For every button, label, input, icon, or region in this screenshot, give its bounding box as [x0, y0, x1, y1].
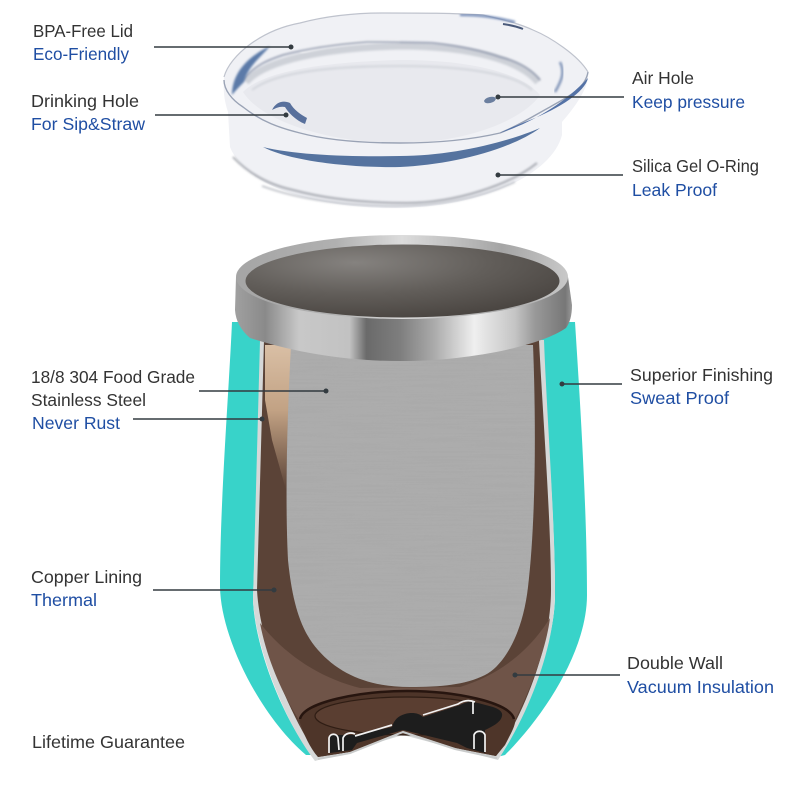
illustration: clear tumbler lid [224, 13, 588, 208]
callout: BPA-free lid: Eco-Friendly [33, 44, 129, 64]
illustration: tumbler cutaway [220, 235, 587, 761]
stainless steel inner wall [287, 345, 535, 687]
callout: copper lining: Copper Lining [31, 567, 142, 587]
callout: silica gel o-ring: Silica Gel O-Ring [632, 156, 759, 176]
rim top surface [236, 235, 568, 319]
callout: superior finishing [560, 365, 773, 408]
lid blue edge band [263, 128, 540, 167]
callout: stainless steel [31, 367, 328, 433]
callout: silica gel o-ring: Leak Proof [632, 180, 717, 200]
lid lower seal lines [233, 157, 537, 203]
callout: copper lining [31, 567, 276, 610]
callout: air hole: Air Hole [632, 68, 694, 88]
tumbler teal left wall [220, 322, 312, 755]
callout: superior finishing: Sweat Proof [630, 388, 729, 408]
callout: drinking hole: Drinking Hole [31, 91, 139, 111]
base white clips [329, 701, 485, 753]
lid rim edges [243, 42, 540, 80]
callout: copper lining: Thermal [31, 590, 97, 610]
lid rim inner floor [243, 60, 540, 143]
callout: superior finishing: Superior Finishing [630, 365, 773, 385]
air hole [483, 96, 497, 104]
callout: BPA-free lid [33, 21, 294, 64]
tan copper reflection [265, 345, 292, 490]
callout: drinking hole: For Sip&Straw [31, 114, 145, 134]
bottom steel edge [318, 732, 497, 759]
vacuum cavity lighter zone [260, 618, 550, 720]
callout: stainless steel: Stainless Steel [31, 390, 146, 410]
copper lining cross-section [257, 340, 551, 757]
drinking hole [272, 102, 307, 124]
base black insulation plug [330, 702, 502, 753]
callout: lifetime guarantee: Lifetime Guarantee [32, 732, 185, 752]
tumbler steel shell [253, 340, 555, 761]
callout: stainless steel: Never Rust [32, 413, 120, 433]
tumbler steel rim band [235, 277, 572, 361]
callout: silica gel o-ring [496, 156, 759, 200]
callout: double wall: Vacuum Insulation [627, 677, 774, 697]
callout: stainless steel: 18/8 304 Food Grade [31, 367, 195, 387]
tumbler interior opening [246, 244, 560, 318]
base disc [299, 691, 515, 757]
callout: BPA-free lid: BPA-Free Lid [33, 21, 133, 41]
tumbler teal right wall [497, 322, 587, 757]
callout: air hole: Keep pressure [632, 92, 745, 112]
callout: double wall: Double Wall [627, 653, 723, 673]
callout: double wall [512, 653, 774, 697]
callout: air hole [496, 68, 745, 112]
lid body silhouette [224, 13, 588, 208]
callout: drinking hole [31, 91, 288, 134]
